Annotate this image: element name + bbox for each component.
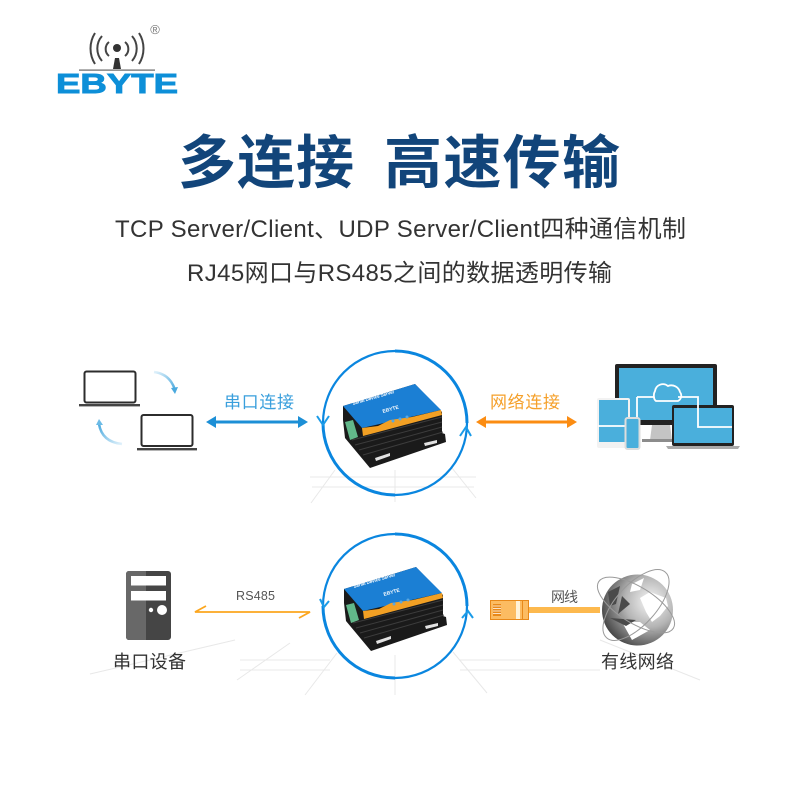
label: network connection: 网络连接 [490, 393, 560, 412]
device: top serial server: Serial Device Server [352, 389, 395, 406]
icon: monitor, tablet, phone and laptop on a cloud network [597, 364, 740, 449]
logo: EBYTE: EBYTE [56, 68, 178, 99]
perspective floor lines [90, 468, 700, 695]
subtitle line 1: TCP Server/Client、UDP Server/Client四种通信机制 [115, 216, 686, 243]
title: 高速传输 [384, 131, 620, 196]
icon: two laptops with rotating arrows [79, 372, 197, 450]
icon: RJ45 plug and cable [490, 600, 600, 620]
ring: top device loop [317, 351, 471, 495]
label: network cable: 网线 [551, 589, 578, 605]
logo: EBYTE [56, 22, 178, 99]
label: RS485: RS485 [236, 589, 275, 603]
device: bottom serial server [344, 567, 447, 651]
device: bottom serial server: Serial Device Server [353, 572, 396, 589]
ring: bottom device loop [320, 534, 473, 678]
subtitle line 2: RJ45网口与RS485之间的数据透明传输 [187, 260, 612, 287]
device: bottom serial server: EBYTE [383, 587, 401, 598]
arrow: network double arrow [476, 416, 577, 428]
logo: EBYTE: ® [150, 22, 160, 37]
title: 多连接 [178, 131, 354, 196]
icon: globe [589, 559, 683, 651]
icon: serial device tower [126, 571, 171, 640]
device: top serial server: EBYTE [382, 404, 400, 415]
device: top serial server [343, 384, 446, 468]
arrow: serial double arrow [206, 416, 308, 428]
arrow: RS485 double half arrow [195, 606, 310, 618]
label: wired network: 有线网络 [601, 652, 674, 672]
title [178, 131, 620, 196]
label: serial device: 串口设备 [113, 652, 186, 672]
label: serial connection: 串口连接 [224, 393, 294, 412]
